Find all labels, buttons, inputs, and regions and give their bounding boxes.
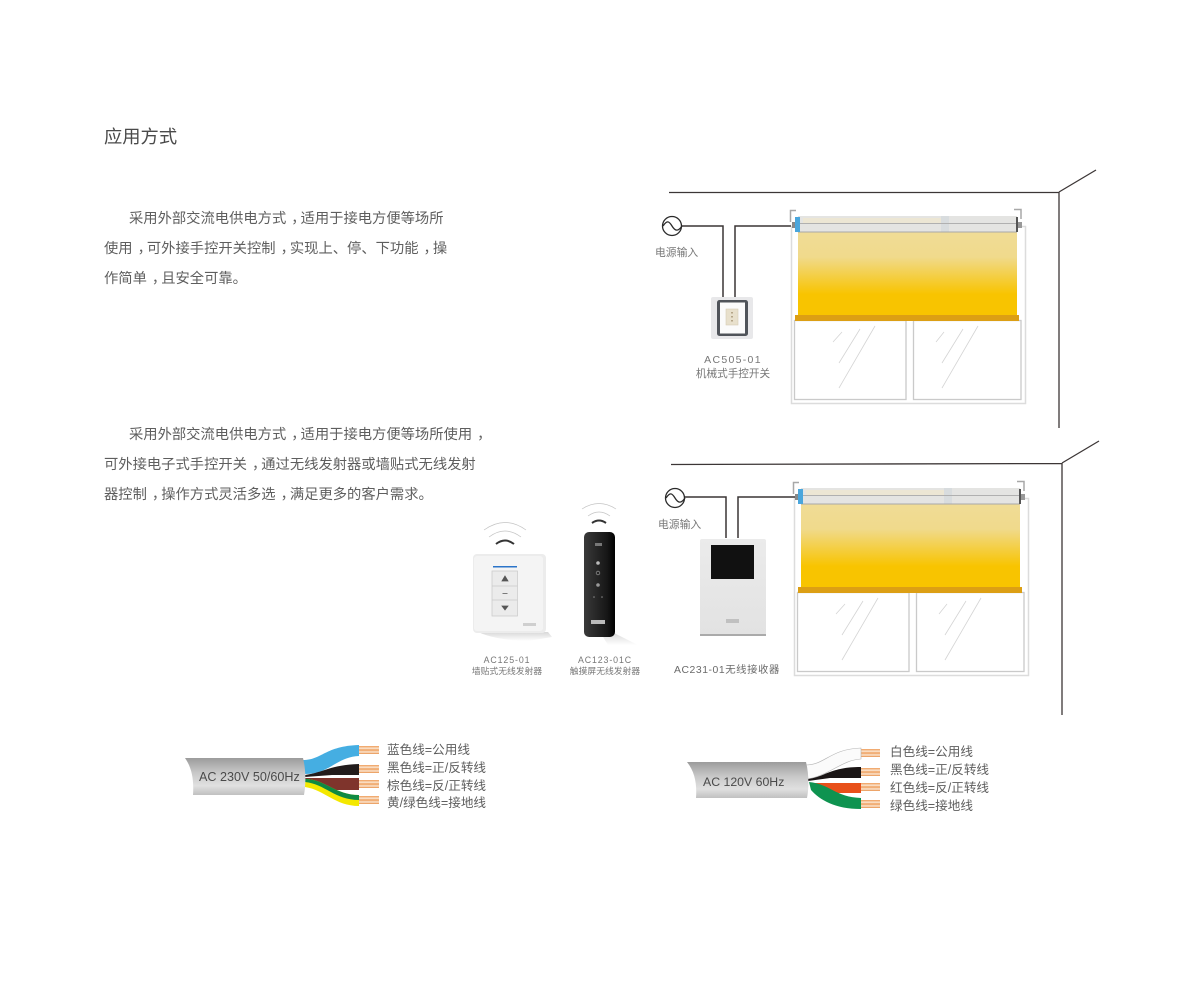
text block: first description: 使用 ，可外接手控开关控制 ，实现上、停、下功能 ，操 [104, 240, 447, 257]
yellow-green wire [305, 779, 359, 806]
receiver label: AC231-01无线接收器 [674, 663, 780, 676]
room wall lines [669, 170, 1096, 428]
switch label: AC505-01 [704, 354, 762, 366]
text block: first description [104, 209, 447, 287]
text block: second description: 器控制 ，操作方式灵活多选 ，满足更多的客户需求。 [104, 486, 433, 503]
wireless waves [496, 540, 514, 544]
wire legend [387, 742, 486, 810]
wire legend: 黑色线=正/反转线 [387, 760, 486, 775]
voltage label: AC 230V 50/60Hz [199, 770, 300, 784]
wire legend: 白色线=公用线 [890, 744, 973, 759]
black wire [808, 767, 861, 781]
wire legend: 蓝色线=公用线 [387, 742, 470, 757]
cable diagram: AC 230V [185, 742, 486, 810]
window frame [792, 226, 1026, 404]
green wire [809, 782, 861, 809]
wall transmitter label: 墙贴式无线发射器 [472, 665, 542, 676]
cable diagram: AC 120V [687, 744, 989, 813]
switch label [696, 354, 770, 380]
copper conductors [359, 746, 379, 804]
power source symbol [666, 488, 685, 508]
black wire [305, 764, 359, 777]
voltage label: AC 120V 60Hz [703, 775, 784, 789]
icon: manual switch [711, 297, 753, 339]
roller blind fabric [798, 232, 1017, 315]
switch label: 机械式手控开关 [696, 367, 770, 380]
blind bottom bar [795, 315, 1019, 321]
red wire [810, 783, 861, 793]
wiring [685, 497, 795, 538]
diagram: wired switch installation [655, 170, 1096, 428]
power label: 电源输入 [655, 245, 698, 259]
touch remote label: AC123-01C [578, 655, 632, 665]
blind bottom bar [798, 587, 1022, 593]
wire legend: 红色线=反/正转线 [890, 780, 989, 795]
text block: second description [104, 425, 491, 503]
power label: 电源输入 [658, 517, 701, 531]
wire legend: 棕色线=反/正转线 [387, 778, 486, 793]
brown wire [305, 778, 359, 790]
wiring [682, 226, 791, 297]
wire legend: 黑色线=正/反转线 [890, 762, 989, 777]
wall transmitter label: AC125-01 [484, 655, 530, 665]
icon: touch remote [582, 504, 638, 645]
icon: wall transmitter [473, 522, 552, 641]
copper conductors [861, 749, 880, 808]
wall transmitter label [472, 655, 542, 676]
power source symbol [662, 216, 682, 236]
wireless waves [592, 520, 606, 523]
wire legend: 绿色线=接地线 [890, 798, 973, 813]
room wall lines [671, 441, 1099, 715]
text block: second description: 可外接电子式手控开关 ，通过无线发射器或墙贴式无线发射 [104, 456, 476, 473]
diagram: wireless installation [472, 441, 1099, 715]
wire legend: 黄/绿色线=接地线 [387, 795, 486, 810]
motor tube head [794, 482, 1025, 504]
window frame [794, 498, 1028, 676]
blue wire [303, 745, 359, 774]
cable sheath [687, 762, 808, 798]
icon: wireless receiver [700, 539, 766, 636]
title: 应用方式 [104, 126, 177, 147]
text block: first description: 采用外部交流电供电方式 ，适用于接电方便等场所 [129, 209, 444, 227]
motor tube head [790, 210, 1022, 232]
wire legend [890, 744, 989, 813]
touch remote label [570, 655, 640, 676]
roller blind fabric [801, 504, 1020, 587]
cable sheath [185, 758, 305, 795]
white wire [806, 748, 861, 779]
text block: first description: 作简单 ，且安全可靠。 [104, 269, 247, 287]
touch remote label: 触摸屏无线发射器 [570, 665, 640, 676]
text block: second description: 采用外部交流电供电方式 ，适用于接电方便等场所使用 ， [129, 425, 491, 443]
